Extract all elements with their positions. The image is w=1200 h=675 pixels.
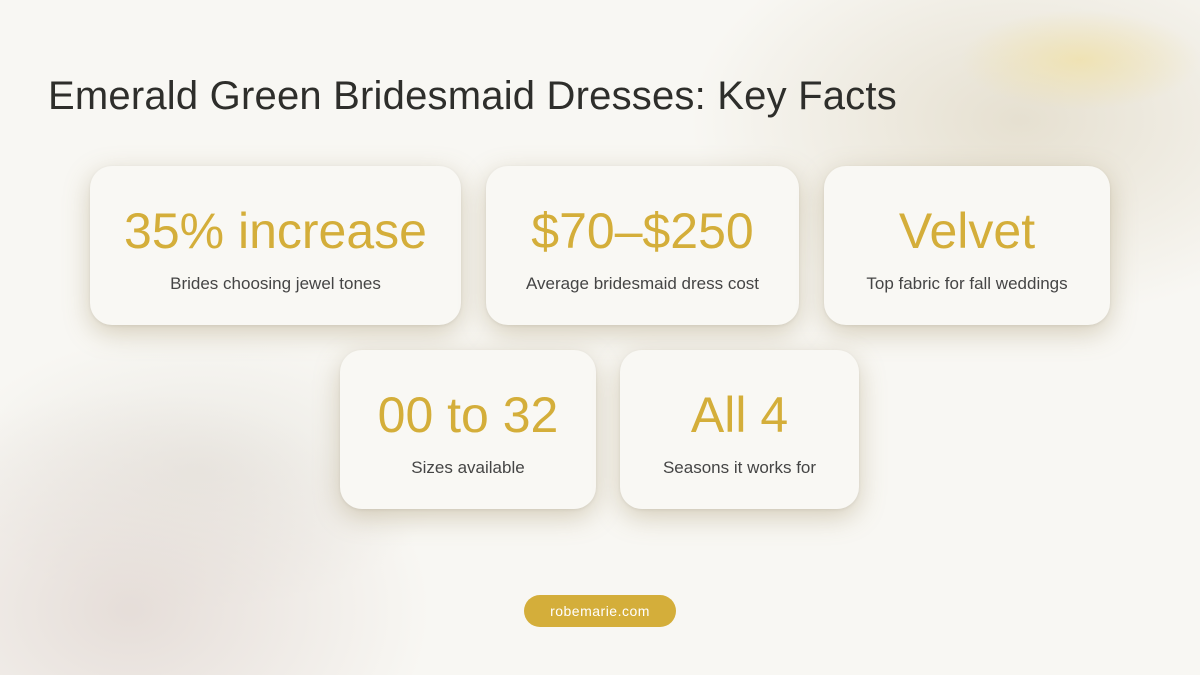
card: sizes: Sizes available <box>411 458 525 477</box>
card: jewel tones: 35% increase <box>124 203 427 259</box>
card: jewel tones: Brides choosing jewel tones <box>170 274 381 293</box>
card: sizes <box>340 350 596 509</box>
card: fabric <box>824 166 1110 325</box>
card: seasons <box>620 350 859 509</box>
card: cost <box>486 166 799 325</box>
footer pill <box>524 595 676 627</box>
card: cost: $70–$250 <box>531 203 754 259</box>
card: fabric: Velvet <box>899 203 1035 259</box>
title: Emerald Green Bridesmaid Dresses: Key Facts <box>48 74 897 118</box>
card: seasons: Seasons it works for <box>663 458 816 477</box>
card: cost: Average bridesmaid dress cost <box>526 274 759 293</box>
footer pill: robemarie.com <box>550 603 650 619</box>
card: sizes: 00 to 32 <box>378 387 558 443</box>
card: fabric: Top fabric for fall weddings <box>866 274 1068 293</box>
card: jewel tones <box>90 166 461 325</box>
card: seasons: All 4 <box>691 387 788 443</box>
